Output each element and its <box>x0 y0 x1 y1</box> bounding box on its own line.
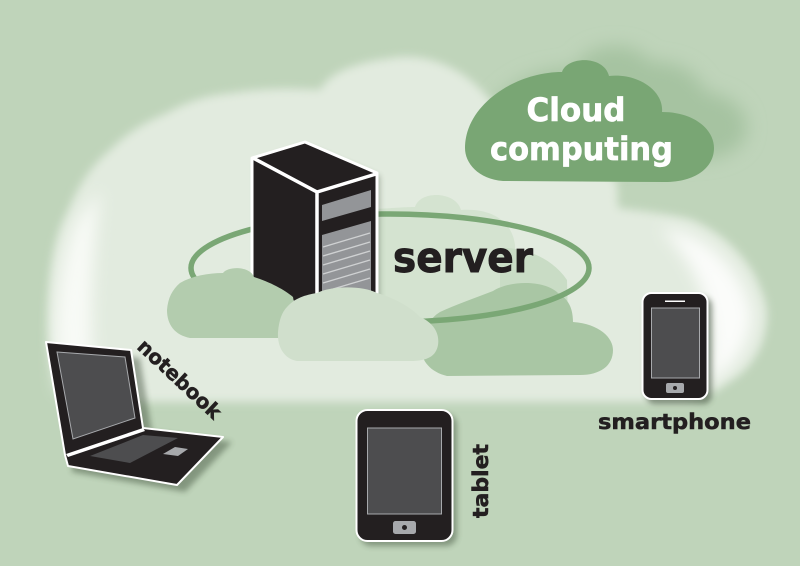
title cloud: computing <box>490 132 673 168</box>
title text: Cloud <box>526 93 626 129</box>
tablet label: tablet <box>469 444 493 518</box>
icon: notebook <box>46 342 232 492</box>
cloud left <box>167 268 300 338</box>
server drive panel <box>322 190 371 221</box>
title cloud shadow <box>490 46 747 170</box>
smartphone label: smartphone <box>598 410 751 434</box>
cloud right <box>421 283 613 376</box>
icon: smartphone <box>642 293 712 404</box>
icon: tablet <box>356 410 457 546</box>
large blurred background cloud <box>48 57 767 402</box>
white glow right edge <box>660 228 752 385</box>
server <box>252 142 380 305</box>
notebook label: notebook <box>133 334 227 424</box>
title cloud <box>465 60 714 182</box>
white glow left edge <box>55 190 100 395</box>
cloud center <box>278 287 438 361</box>
server label: server <box>393 235 534 283</box>
back clouds behind ring <box>375 195 568 330</box>
orbit ring <box>191 214 589 322</box>
server vent panel <box>322 221 371 302</box>
